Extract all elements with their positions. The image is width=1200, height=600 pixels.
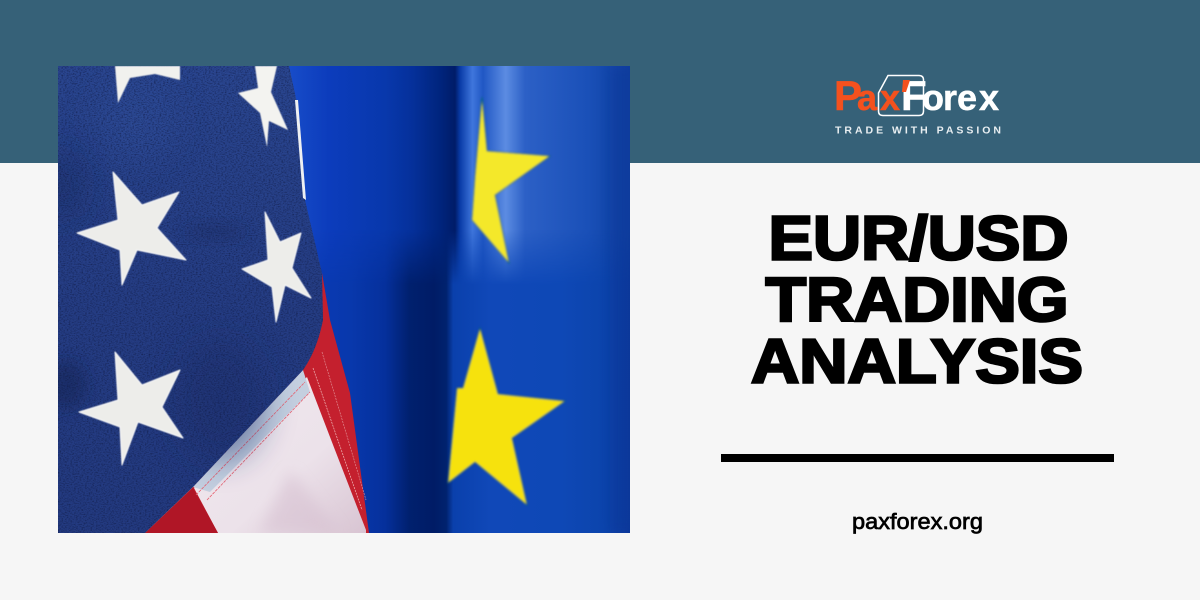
- logo wordmark: e: [957, 77, 977, 118]
- US flag stripes: [145, 273, 369, 533]
- EU flag fabric: [280, 66, 630, 533]
- logo wordmark: a: [857, 77, 878, 118]
- US star: middle left: [77, 172, 186, 285]
- logo wordmark: o: [922, 77, 944, 118]
- US star: top left: [115, 66, 180, 103]
- website link: paxforex.org: [852, 509, 983, 534]
- logo wordmark: F: [901, 72, 927, 119]
- US flag canton: [40, 66, 323, 533]
- EU star: lower: [448, 328, 565, 505]
- title line 1: EUR/USD: [768, 204, 1068, 274]
- title line 2: TRADING: [766, 266, 1068, 335]
- logo wordmark: x: [979, 77, 999, 118]
- US star: lower left: [79, 352, 183, 465]
- logo wordmark: P: [834, 72, 862, 119]
- title: [751, 204, 1083, 396]
- logo slash accent: [902, 80, 910, 92]
- logo wordmark: r: [943, 77, 957, 118]
- logo tagline: TRADE WITH PASSION: [835, 124, 1001, 136]
- title line 3: ANALYSIS: [751, 328, 1083, 396]
- photo: US and EU flags: [40, 66, 630, 533]
- US star: middle right: [242, 212, 311, 322]
- header band: [0, 0, 1200, 163]
- logo wordmark: x: [880, 77, 900, 118]
- logo frame: [878, 76, 924, 116]
- US star: top right: [238, 66, 288, 147]
- EU star: upper: [472, 97, 550, 263]
- divider rule: [721, 454, 1114, 462]
- logo: PaxForex: [834, 72, 1001, 136]
